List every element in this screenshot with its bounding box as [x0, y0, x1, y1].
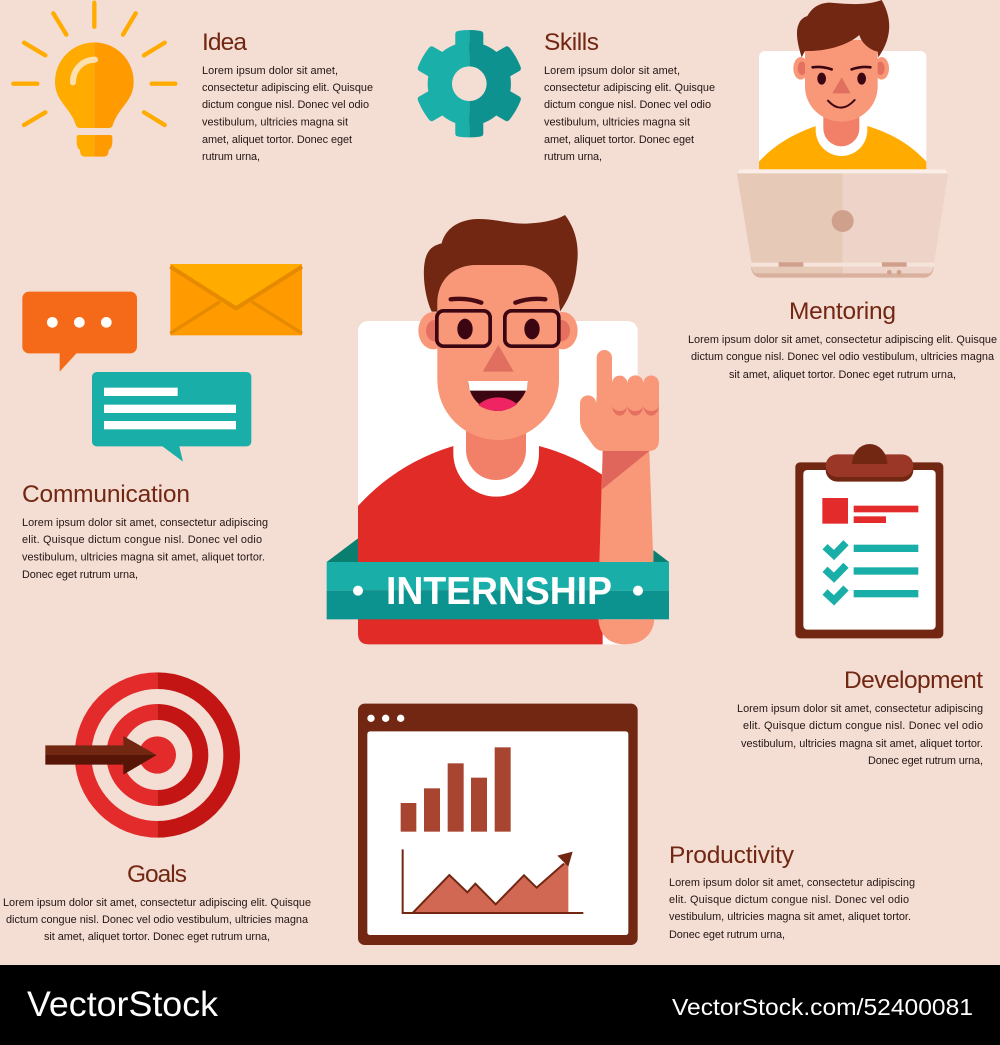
text block: Development [737, 703, 983, 767]
footer bar [0, 965, 1000, 1045]
raised arm and hand [599, 451, 653, 563]
text block: Productivity: vestibulum, ultricies magna sit amet, aliquet tortor. [669, 911, 911, 923]
text block: Communication: elit. Quisque dictum congue nisl. Donec vel odio [22, 534, 262, 546]
heading: Mentoring: Mentoring [789, 298, 896, 325]
chart window: bars and area chart [358, 704, 638, 945]
text block: Skills [544, 65, 715, 163]
glasses [437, 311, 559, 346]
text block: Productivity: Lorem ipsum dolor sit amet, consectetur adipiscing [669, 877, 915, 889]
area chart with arrow [403, 849, 583, 913]
text block: Idea [202, 65, 373, 163]
text block: Productivity: Donec eget rutrum urna, [669, 929, 785, 941]
footer image id: VectorStock.com/52400081 [672, 994, 973, 1020]
text block: Idea: dictum congue nisl. Donec vel odio [202, 99, 369, 111]
banner [327, 538, 358, 562]
text block: Skills: amet, aliquet tortor. Donec eget [544, 134, 694, 146]
text block: Idea: amet, aliquet tortor. Donec eget [202, 134, 352, 146]
heading: Goals: Goals [127, 861, 187, 888]
icon: envelope [170, 264, 302, 335]
illustration: mentor at laptop [737, 0, 948, 278]
text block: Mentoring: Lorem ipsum dolor sit amet, consectetur adipiscing elit. Quisque [688, 334, 997, 346]
text block: Skills: consectetur adipiscing elit. Quisque [544, 82, 715, 94]
text block: Skills: vestibulum, ultricies magna sit [544, 116, 690, 128]
icons: speech bubbles and envelope [22, 264, 302, 462]
icon: light bulb [13, 3, 175, 157]
text block: Development: elit. Quisque dictum congue nisl. Donec vel odio [743, 720, 983, 732]
heading: Development: Development [844, 667, 983, 694]
text block: Mentoring: dictum congue nisl. Donec vel odio vestibulum, ultricies magna [691, 351, 995, 363]
forearm below banner [598, 619, 654, 644]
text block: Communication: Donec eget rutrum urna, [22, 569, 138, 581]
text block: Communication [22, 517, 268, 581]
text block: Skills: rutrum urna, [544, 151, 602, 163]
white card [358, 321, 638, 644]
mouth [468, 381, 528, 411]
head [437, 265, 559, 440]
footer logo text: VectorStock [27, 985, 219, 1024]
text block: Mentoring: sit amet, aliquet tortor. Donec eget rutrum urna, [729, 369, 956, 381]
text block: Communication: Lorem ipsum dolor sit amet, consectetur adipiscing [22, 517, 268, 529]
icon: orange chat bubble [22, 292, 137, 372]
text block: Productivity [669, 877, 915, 941]
heading: Skills: Skills [544, 29, 599, 56]
icon: teal chat bubble [92, 372, 251, 462]
text block: Communication: vestibulum, ultricies magna sit amet, aliquet tortor. [22, 552, 265, 564]
hair [424, 215, 578, 312]
red shirt [358, 446, 603, 644]
text block: Goals [3, 897, 311, 943]
text block: Productivity: elit. Quisque dictum congue nisl. Donec vel odio [669, 894, 909, 906]
text block: Idea: consectetur adipiscing elit. Quisque [202, 82, 373, 94]
text block: Development: Lorem ipsum dolor sit amet, consectetur adipiscing [737, 703, 983, 715]
text block: Goals: Lorem ipsum dolor sit amet, consectetur adipiscing elit. Quisque [3, 897, 311, 909]
text block: Idea: Lorem ipsum dolor sit amet, [202, 65, 338, 77]
text block: Mentoring [688, 334, 997, 381]
text block: Development: Donec eget rutrum urna, [868, 755, 983, 767]
text block: Idea: vestibulum, ultricies magna sit [202, 116, 348, 128]
icon: clipboard checklist [795, 444, 943, 638]
icon: gear [416, 30, 523, 137]
heading: Communication: Communication [22, 481, 190, 508]
text block: Goals: dictum congue nisl. Donec vel odio vestibulum, ultricies magna [6, 914, 309, 926]
text block: Skills: Lorem ipsum dolor sit amet, [544, 65, 680, 77]
text block: Idea: rutrum urna, [202, 151, 260, 163]
illustration: central character with banner [327, 215, 669, 644]
bar chart [401, 747, 511, 832]
heading: Productivity: Productivity [669, 842, 795, 869]
text block: Skills: dictum congue nisl. Donec vel odio [544, 99, 711, 111]
text block: Development: vestibulum, ultricies magna sit amet, aliquet tortor. [741, 738, 983, 750]
heading: Idea: Idea [202, 29, 247, 56]
text block: Goals: sit amet, aliquet tortor. Donec eget rutrum urna, [44, 931, 270, 943]
banner title: INTERNSHIP: INTERNSHIP [386, 570, 612, 613]
icon: target with arrow [45, 681, 232, 829]
